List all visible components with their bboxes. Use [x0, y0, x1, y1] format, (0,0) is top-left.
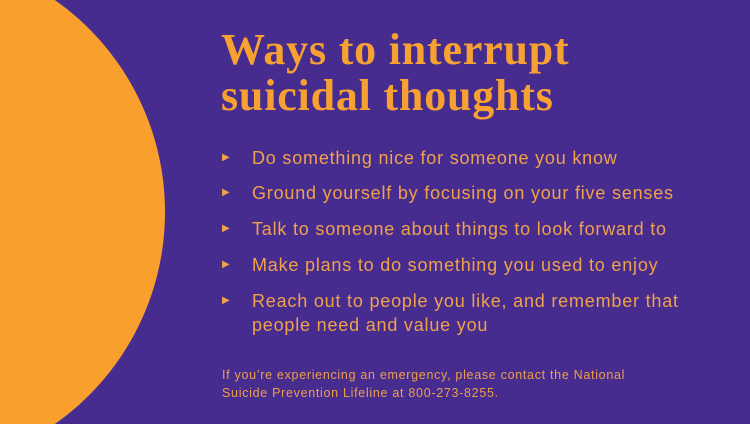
title: Ways to interrupt	[221, 25, 569, 74]
bullet 3	[222, 219, 667, 239]
bullet list: Reach out to people you like, and remember that	[252, 291, 679, 311]
bullet list: Ground yourself by focusing on your five senses	[252, 183, 674, 203]
bullet list: ▶	[222, 295, 230, 306]
bullet list: ▶	[222, 187, 230, 198]
title: suicidal thoughts	[221, 71, 554, 120]
bullet list: Make plans to do something you used to enjoy	[252, 255, 658, 275]
bullet list: ▶	[222, 259, 230, 270]
bullet list: people need and value you	[252, 315, 488, 335]
bullet 1	[222, 148, 618, 168]
bullet list	[222, 148, 679, 335]
bullet 4	[222, 255, 658, 275]
footer note	[222, 368, 625, 400]
bullet 5	[222, 291, 679, 335]
bullet list: ▶	[222, 223, 230, 234]
bullet list: ▶	[222, 152, 230, 163]
footer note: Suicide Prevention Lifeline at 800-273-8255.	[222, 386, 499, 400]
title	[221, 25, 569, 120]
bullet list: Talk to someone about things to look forward to	[252, 219, 667, 239]
bullet list: Do something nice for someone you know	[252, 148, 618, 168]
footer note: If you’re experiencing an emergency, please contact the National	[222, 368, 625, 382]
bullet 2	[222, 183, 674, 203]
